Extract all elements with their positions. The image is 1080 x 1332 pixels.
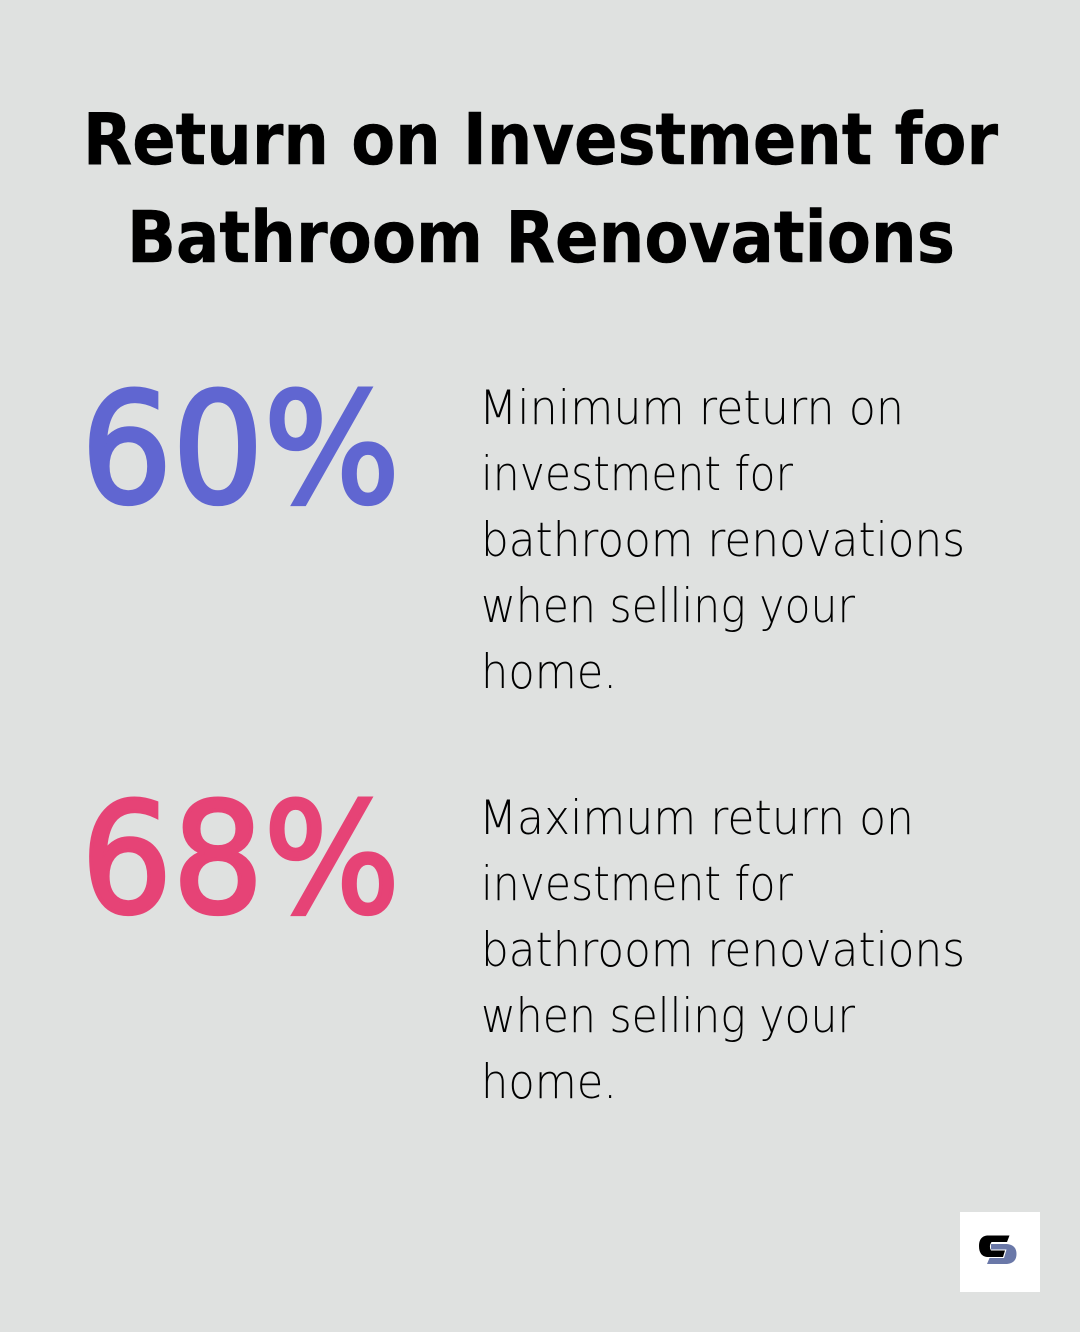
stat: 68%: 68%	[81, 771, 400, 949]
text block: minimum return description: investment for	[481, 447, 793, 502]
title	[83, 98, 999, 279]
text block: minimum return description: home.	[481, 645, 617, 700]
text block: maximum return description	[479, 791, 965, 1110]
text block: maximum return description: investment for	[481, 857, 793, 912]
text block: maximum return description: Maximum return on	[479, 791, 914, 846]
text block: minimum return description: Minimum return on	[479, 381, 904, 436]
text block: minimum return description	[479, 381, 965, 700]
title: Bathroom Renovations	[127, 196, 955, 279]
text block: maximum return description: when selling your	[481, 989, 855, 1044]
text block: maximum return description: home.	[481, 1055, 617, 1110]
panel: maximum return	[81, 771, 965, 1110]
stat: 60%: 60%	[81, 361, 400, 539]
text block: minimum return description: bathroom renovations	[481, 513, 965, 568]
icon: logo badge	[960, 1212, 1040, 1292]
panel: minimum return	[81, 361, 965, 700]
text block: maximum return description: bathroom renovations	[481, 923, 965, 978]
text block: minimum return description: when selling your	[481, 579, 855, 634]
title: Return on Investment for	[83, 98, 999, 181]
